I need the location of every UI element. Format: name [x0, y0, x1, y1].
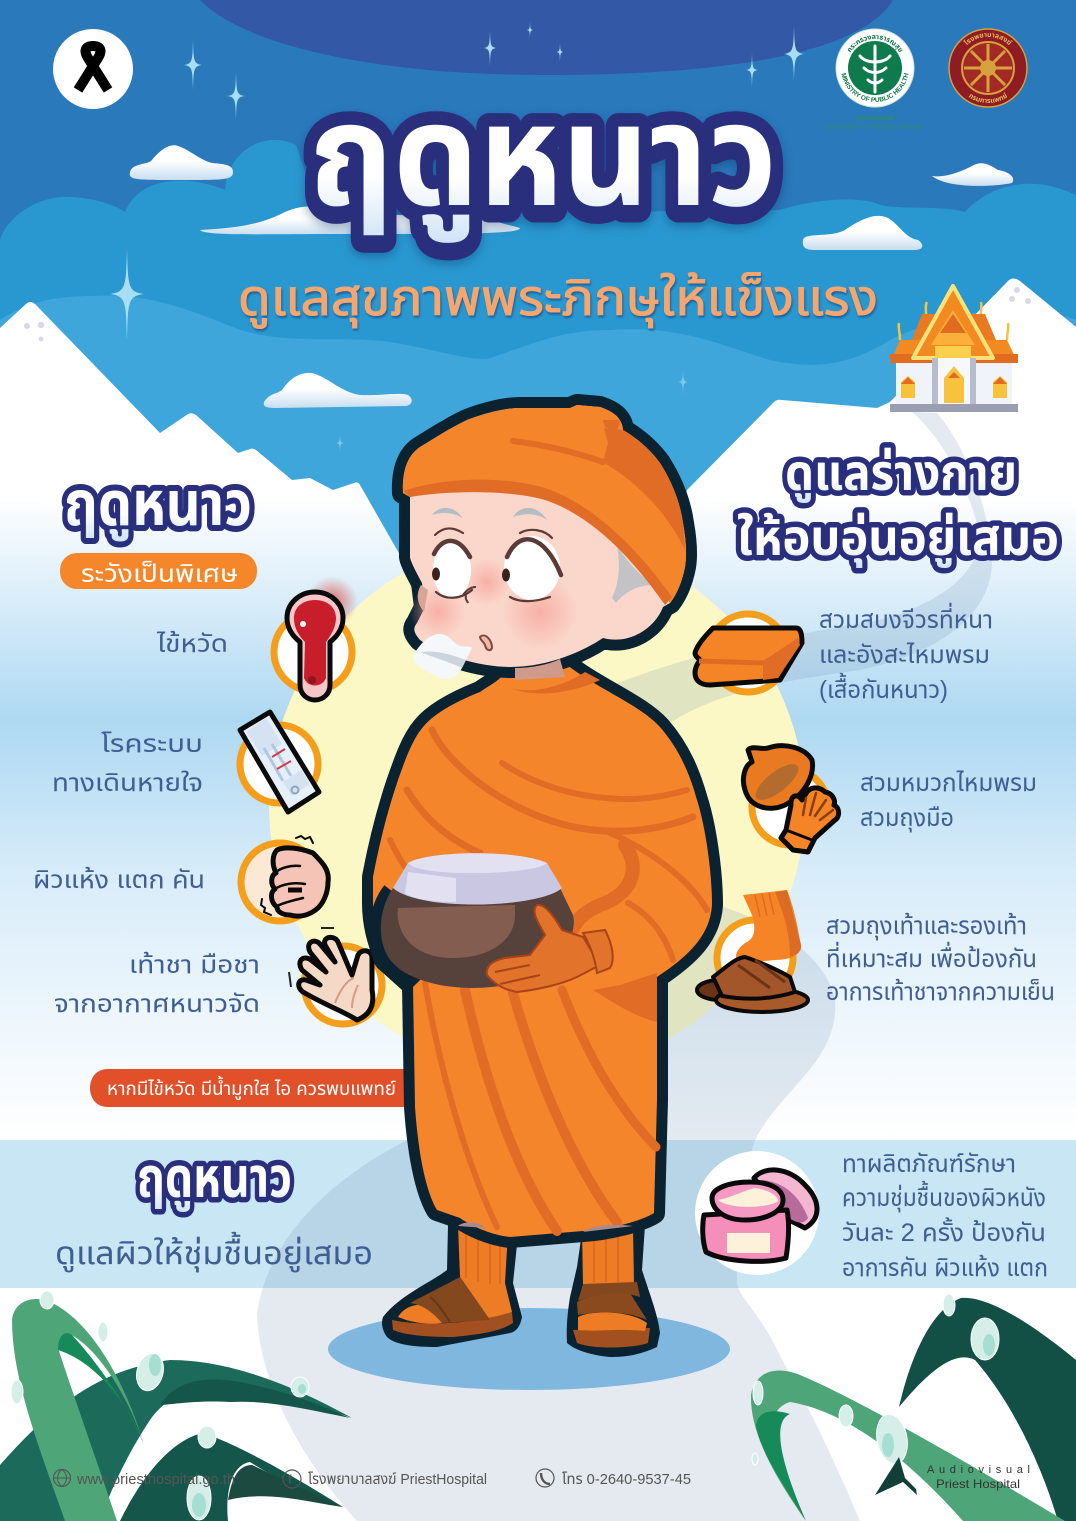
text: common cold: ไข้หวัด — [156, 630, 228, 658]
heading: keep the body warm: ดูแลร่างกาย — [785, 445, 1017, 503]
text: wear thick robes: สวมสบงจีวรที่หนา — [819, 602, 993, 634]
icon: thermometer — [274, 576, 358, 700]
icon: Thai temple — [890, 286, 1018, 412]
text: wear hat and gloves: สวมถุงมือ — [860, 804, 954, 833]
logo: Ministry of Public Health: กระทรวงสาธารณสุข — [848, 34, 903, 52]
text: wear socks and shoes — [826, 912, 1055, 1006]
logo: Priest Hospital — [948, 28, 1028, 108]
text: moisturise skin — [842, 1150, 1048, 1282]
text: wear socks and shoes: สวมถุงเท้าและรองเท้า — [826, 912, 1027, 941]
monk head — [403, 405, 686, 680]
audiovisual credit: Audiovisual — [927, 1464, 1030, 1476]
facebook page: f — [288, 1472, 292, 1487]
icon: wool hat and glove — [743, 746, 839, 852]
footer contacts — [54, 1469, 691, 1488]
heading: winter caution: ฤดูหนาว — [64, 470, 252, 542]
logo: Ministry of Public Health: กรมการแพทย์ — [857, 116, 893, 122]
logo: Priest Hospital: กรมการแพทย์ — [968, 92, 1007, 103]
text: dry skin: ผิวแห้ง แตก คัน — [33, 866, 205, 894]
website: www.priesthospital.go.th — [76, 1471, 235, 1488]
audiovisual credit: Priest Hospital — [936, 1477, 1020, 1491]
logo: Ministry of Public Health — [825, 28, 926, 131]
text: wear thick robes: (เสื้อกันหนาว) — [819, 672, 948, 704]
text: moisturise skin: วันละ 2 ครั้ง ป้องกัน — [842, 1216, 1046, 1247]
text: wear thick robes — [819, 602, 993, 704]
text: respiratory disease: โรคระบบ — [101, 730, 203, 758]
text: moisturise skin: ความชุ่มชื้นของผิวหนัง — [842, 1180, 1046, 1213]
heading: winter skin care: ฤดูหนาว — [137, 1146, 292, 1212]
clouds — [130, 145, 1013, 408]
text: wear socks and shoes: ที่เหมาะสม เพื่อป้องกัน — [826, 941, 1037, 973]
text: moisturise skin: ทาผลิตภัณฑ์รักษา — [842, 1150, 1016, 1178]
leaves and footer plants — [0, 1291, 1076, 1521]
subtitle: ดูแลสุขภาพพระภิกษุให้แข็งแรง — [238, 270, 878, 328]
text: numb feet and hands: จากอากาศหนาวจัด — [54, 990, 260, 1018]
text: numb feet and hands: เท้าชา มือชา — [129, 951, 260, 979]
monk hand holding bowl — [487, 905, 613, 992]
pill: be extra careful — [60, 553, 257, 589]
logo: Ministry of Public Health: DEPARTMENT OF MEDICAL SERVICES — [825, 125, 926, 131]
text: moisturise skin: อาการคัน ผิวแห้ง แตก — [842, 1254, 1048, 1282]
shadow under monk — [328, 1308, 730, 1390]
text: respiratory disease — [52, 730, 203, 797]
text: wear hat and gloves — [860, 769, 1037, 833]
text: wear socks and shoes: อาการเท้าชาจากความเย็น — [826, 978, 1055, 1006]
heading: keep the body warm: ให้อบอุ่นอยู่เสมอ — [737, 510, 1059, 568]
monk character — [373, 405, 712, 1357]
banner: see a doctor: หากมีไข้หวัด มีน้ำมูกใส ไอ ควรพบแพทย์ — [107, 1075, 396, 1101]
icon: socks and sandals — [697, 890, 808, 1012]
telephone: โทร 0-2640-9537-45 — [562, 1471, 691, 1488]
pill: be extra careful: ระวังเป็นพิเศษ — [81, 560, 238, 588]
icon: rapid test kit — [240, 712, 319, 812]
facebook page: โรงพยาบาลสงฆ์ PriestHospital — [308, 1471, 487, 1488]
icon: scratching dry skin — [241, 836, 328, 921]
text: wear hat and gloves: สวมหมวกไหมพรม — [860, 769, 1037, 797]
logo: Priest Hospital: โรงพยาบาลสงฆ์ — [963, 33, 1013, 45]
alms bowl — [381, 853, 574, 988]
logo: Ministry of Public Health: MINISTRY OF PUBLIC HEALTH — [842, 73, 908, 102]
audiovisual credit — [875, 1457, 1030, 1495]
banner: see a doctor — [90, 1069, 405, 1107]
icon: moisturiser jar — [695, 1151, 819, 1275]
text: respiratory disease: ทางเดินหายใจ — [52, 769, 203, 797]
text: numb feet and hands — [54, 951, 260, 1018]
text: keep skin moist: ดูแลผิวให้ชุ่มชื้นอยู่เสมอ — [55, 1231, 373, 1273]
heading: keep the body warm — [737, 445, 1059, 568]
icon: folded robe — [695, 614, 802, 692]
icon: numb hand — [289, 928, 382, 1024]
title: ฤดูหนาว — [309, 77, 777, 243]
text: wear thick robes: และอังสะไหมพรม — [819, 641, 990, 669]
monk robe — [373, 664, 712, 1237]
monk feet and sandals — [382, 1225, 660, 1357]
icon: black mourning ribbon — [53, 29, 133, 109]
